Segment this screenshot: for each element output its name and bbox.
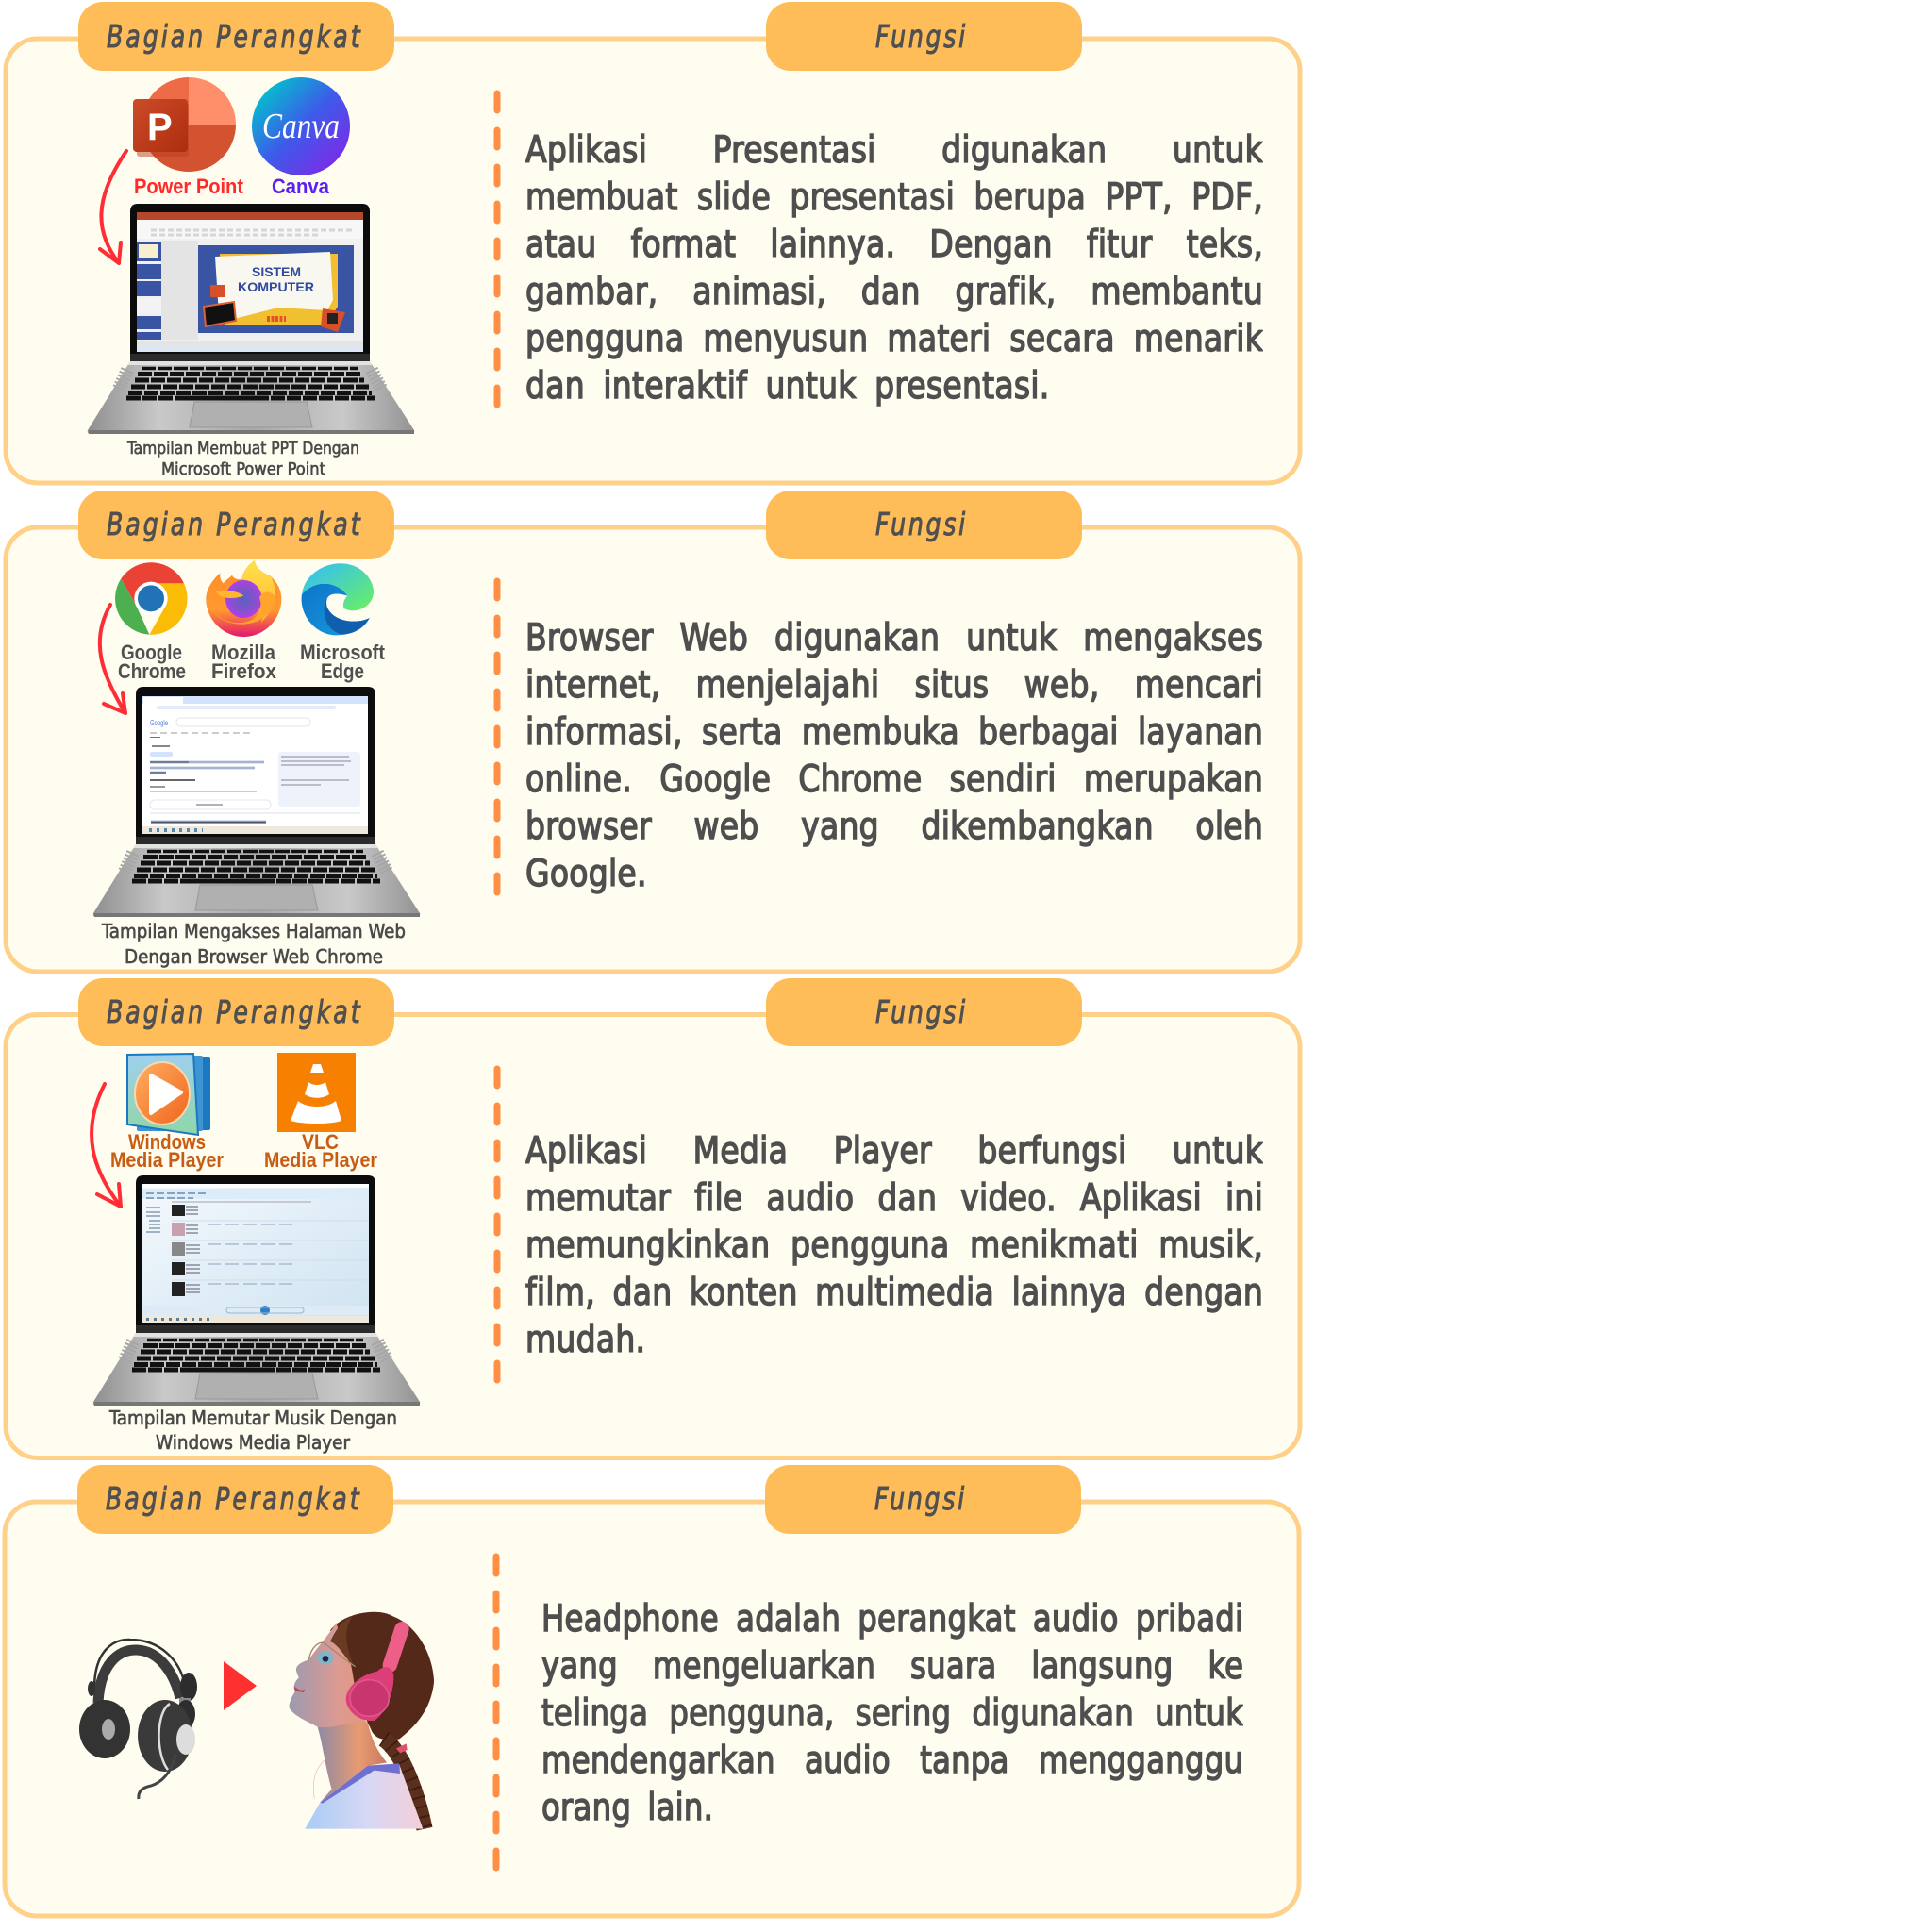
- text block: function: Headphone adalah perangkat audio pribadi: [541, 1598, 1243, 1641]
- text block: function: Aplikasi Media Player berfungsi untuk: [525, 1130, 1263, 1173]
- panel: media players: [6, 978, 1300, 1458]
- labels: media players: Windows: [128, 1130, 206, 1154]
- laptop with Google search: [93, 687, 420, 917]
- caption: Microsoft Power Point: [161, 459, 325, 479]
- text block: function: memungkinkan pengguna menikmati musik,: [525, 1224, 1263, 1267]
- caption: Windows Media Player: [156, 1431, 351, 1454]
- panel: headphones: [5, 1465, 1299, 1916]
- text block: function: telinga pengguna, sering digunakan untuk: [541, 1692, 1243, 1735]
- labels: media players: Media Player: [264, 1148, 377, 1172]
- heading: Bagian Perangkat: Bagian Perangkat: [107, 995, 361, 1031]
- laptop with PowerPoint: KOMPUTER: [238, 279, 314, 294]
- text block: function: atau format lainnya. Dengan fitur teks,: [525, 224, 1263, 266]
- text block: function: membuat slide presentasi berupa PPT, PDF,: [525, 176, 1263, 219]
- heading: Fungsi: Fungsi: [875, 20, 966, 56]
- labels: browsers: Mozilla: [211, 641, 276, 664]
- heading: Bagian Perangkat: Bagian Perangkat: [107, 508, 361, 543]
- icon: PowerPoint: [133, 77, 236, 172]
- text block: function: Browser Web digunakan untuk mengakses: [525, 617, 1263, 659]
- labels: media players: VLC: [302, 1130, 339, 1154]
- text block: function: gambar, animasi, dan grafik, membantu: [525, 271, 1263, 313]
- arrow: [92, 1084, 121, 1207]
- heading: Bagian Perangkat: [77, 1465, 393, 1534]
- icon: headphones: [79, 1640, 197, 1799]
- text block: function: Google.: [525, 853, 647, 895]
- icon: Windows Media Player: [127, 1054, 210, 1135]
- heading: Fungsi: [766, 491, 1082, 559]
- heading: Fungsi: [766, 978, 1082, 1046]
- caption: Tampilan Memutar Musik Dengan: [108, 1407, 397, 1429]
- caption: Tampilan Mengakses Halaman Web: [101, 920, 406, 942]
- text block: function: Aplikasi Presentasi digunakan untuk: [525, 129, 1263, 172]
- text block: function: yang mengeluarkan suara langsung ke: [541, 1645, 1243, 1688]
- text block: function: [525, 127, 1263, 420]
- caption: [101, 920, 406, 968]
- text block: function: informasi, serta membuka berbagai layanan: [525, 711, 1263, 754]
- illustration: girl wearing headphones: [290, 1612, 434, 1829]
- panel: web browsers: [6, 491, 1300, 972]
- text block: function: mudah.: [525, 1319, 645, 1361]
- heading: Fungsi: [765, 1465, 1081, 1534]
- text block: function: pengguna menyusun materi secara menarik: [525, 318, 1263, 360]
- dashed divider: [492, 1557, 500, 1871]
- arrow: [100, 605, 125, 713]
- text block: function: internet, menjelajahi situs web, mencari: [525, 664, 1263, 707]
- heading: Fungsi: Fungsi: [875, 995, 966, 1031]
- dashed divider: [494, 93, 500, 408]
- heading: Bagian Perangkat: Bagian Perangkat: [106, 1482, 360, 1518]
- text block: function: mendengarkan audio tanpa mengganggu: [541, 1740, 1243, 1782]
- labels: browsers: Edge: [321, 659, 364, 683]
- icon: Firefox: [206, 560, 281, 637]
- icon: Chrome: [115, 562, 188, 635]
- labels: browsers: Chrome: [118, 659, 186, 683]
- arrow: [100, 151, 126, 263]
- laptop with PowerPoint: [88, 204, 414, 434]
- label: Power Point: Power Point: [134, 175, 244, 198]
- icon: Canva: Canva: [262, 107, 340, 146]
- text block: function: dan interaktif untuk presentasi.: [525, 365, 1050, 408]
- text block: function: [525, 615, 1263, 908]
- text block: function: memutar file audio dan video. Aplikasi ini: [525, 1177, 1263, 1220]
- labels: browsers: Microsoft: [300, 641, 386, 664]
- heading: Fungsi: [766, 2, 1082, 71]
- heading: Fungsi: Fungsi: [875, 508, 966, 543]
- text block: function: online. Google Chrome sendiri merupakan: [525, 758, 1263, 801]
- heading: Fungsi: Fungsi: [874, 1482, 965, 1518]
- caption: Tampilan Membuat PPT Dengan: [126, 439, 359, 458]
- dashed divider: [494, 1069, 500, 1383]
- labels: browsers: [118, 641, 386, 683]
- icon: PowerPoint: P: [147, 107, 173, 148]
- icon: Canva: [252, 77, 350, 175]
- laptop with media player: [93, 1175, 420, 1406]
- heading: Bagian Perangkat: [78, 491, 394, 559]
- caption: Dengan Browser Web Chrome: [125, 945, 383, 968]
- text block: function: [525, 1128, 1263, 1374]
- heading: Bagian Perangkat: Bagian Perangkat: [107, 20, 361, 56]
- dashed divider: [494, 581, 500, 895]
- label: Canva: Canva: [272, 175, 330, 198]
- text block: function: [541, 1596, 1243, 1841]
- text block: function: browser web yang dikembangkan oleh: [525, 806, 1263, 848]
- caption: [108, 1407, 397, 1454]
- laptop with Google search: Google: [150, 719, 168, 727]
- laptop with PowerPoint: SISTEM: [252, 264, 301, 279]
- labels: media players: Media Player: [110, 1148, 224, 1172]
- labels: browsers: Firefox: [211, 659, 277, 683]
- labels: browsers: Google: [121, 641, 182, 664]
- text block: function: orang lain.: [541, 1787, 713, 1829]
- text block: function: film, dan konten multimedia lainnya dengan: [525, 1272, 1263, 1314]
- heading: Bagian Perangkat: [78, 978, 394, 1046]
- arrow: red triangle: [224, 1661, 257, 1710]
- heading: Bagian Perangkat: [78, 2, 394, 71]
- icon: Edge: [302, 563, 374, 635]
- panel: presentation apps: [6, 2, 1300, 483]
- labels: media players: [110, 1130, 377, 1172]
- icon: VLC: [277, 1053, 356, 1132]
- caption: [126, 439, 359, 479]
